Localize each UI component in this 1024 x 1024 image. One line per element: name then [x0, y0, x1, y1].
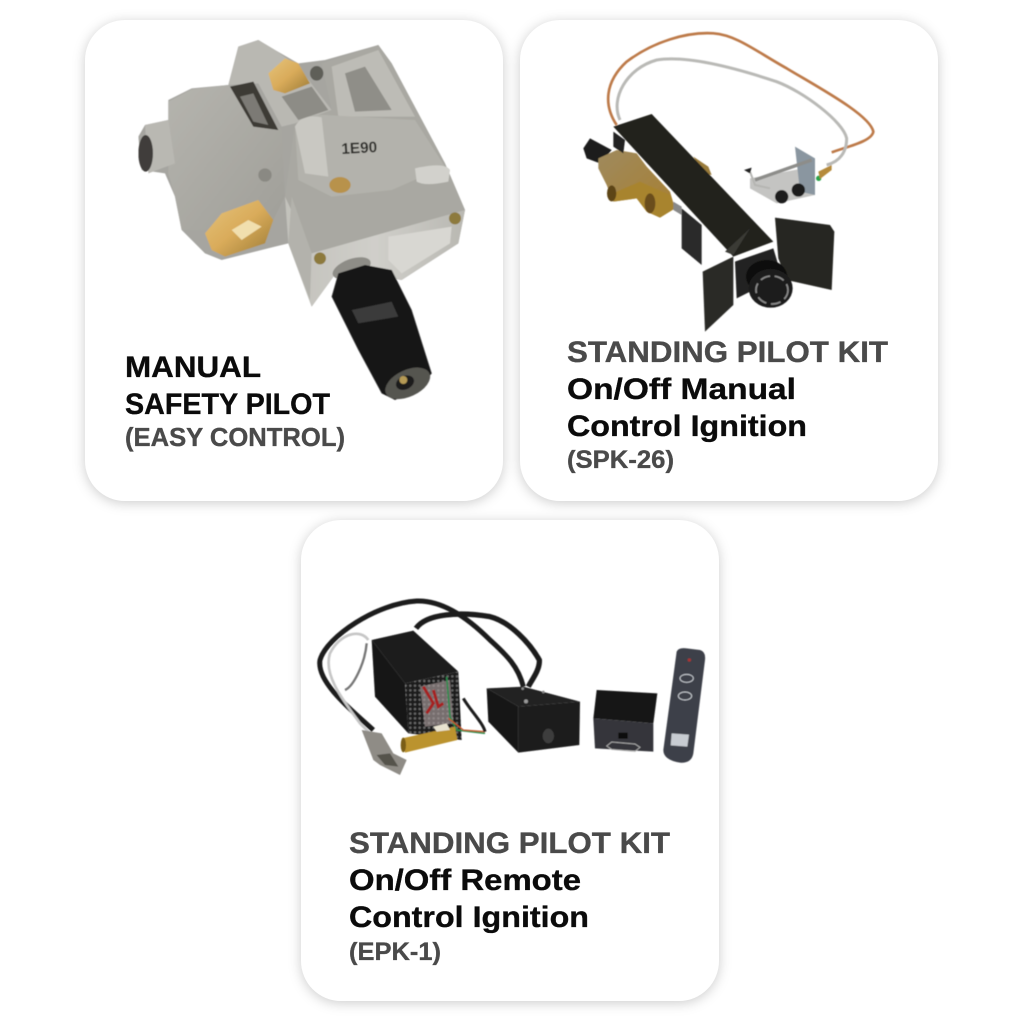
icon: remote pilot kit photo — [320, 601, 705, 775]
heading: standing pilot kit manual — [567, 336, 888, 474]
heading: standing pilot kit remote — [349, 827, 670, 966]
heading: manual safety pilot: SAFETY PILOT — [125, 388, 330, 421]
icon: gas valve photo — [138, 40, 465, 406]
card shadows — [85, 22, 938, 1003]
icon: manual pilot kit photo — [583, 33, 873, 332]
heading: standing pilot kit manual: STANDING PILOT KIT — [567, 336, 888, 369]
panel: standing pilot kit manual — [520, 20, 938, 501]
icon: gas valve photo: 1E90 — [341, 139, 378, 158]
panel: manual safety pilot — [85, 20, 503, 501]
heading: standing pilot kit remote: Control Ignition — [349, 901, 589, 934]
heading: standing pilot kit remote: STANDING PILOT KIT — [349, 827, 670, 860]
heading: standing pilot kit manual: Control Ignition — [567, 410, 807, 443]
heading: manual safety pilot: MANUAL — [125, 351, 261, 384]
heading: standing pilot kit remote: (EPK-1) — [349, 938, 441, 966]
heading: manual safety pilot: (EASY CONTROL) — [125, 422, 345, 452]
panel: standing pilot kit remote — [301, 520, 719, 1001]
heading: standing pilot kit manual: (SPK-26) — [567, 446, 674, 474]
heading: standing pilot kit manual: On/Off Manual — [567, 373, 796, 406]
heading: manual safety pilot — [125, 351, 345, 452]
heading: standing pilot kit remote: On/Off Remote — [349, 864, 581, 897]
